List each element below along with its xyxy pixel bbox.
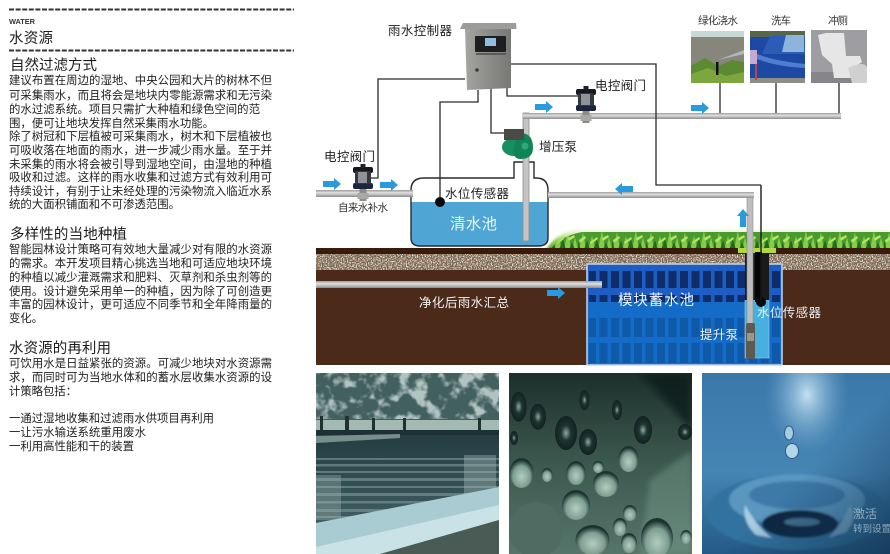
underground soil	[316, 248, 890, 365]
label: valve right: 电控阀门	[595, 78, 646, 93]
text block: water reuse: 计策略包括：	[9, 384, 77, 398]
label: module tank: 模块蓄水池	[618, 292, 694, 309]
top dashed rule	[9, 8, 294, 10]
sensor in module tank	[756, 297, 766, 307]
label: tap water: 自来水补水	[338, 201, 388, 214]
building band	[316, 420, 499, 430]
valve left	[353, 164, 373, 201]
label: WATER: WATER	[9, 17, 36, 26]
text block: diverse local planting: 的需求。本开发项目精心挑选当地和可适应地块环境	[9, 256, 272, 270]
text block: natural filtration: 持续设计，有别于让未经处理的污染物流入临近水系	[9, 184, 272, 198]
list: reuse strategies: 一通过湿地收集和过滤雨水供项目再利用	[9, 411, 214, 425]
photo: pond	[316, 373, 499, 554]
valve right	[576, 86, 596, 123]
text block: natural filtration: 统的大面积铺面和不可渗透范围。	[9, 197, 180, 211]
text block: diverse local planting: 丰富的园林设计，更可适应不同季节和全年降雨量的	[9, 297, 272, 311]
text block: natural filtration: 可吸收落在地面的雨水，进一步减少雨水量。至于并	[9, 143, 272, 157]
label: irrigation: 绿化浇水	[698, 14, 738, 27]
text block: natural filtration: 的水过滤系统。项目只需扩大种植和绿色空间的范	[9, 102, 260, 116]
faint watermark: 转到设置	[853, 523, 890, 535]
title: water resources: 水资源	[9, 30, 54, 47]
lift pump	[746, 323, 755, 359]
text block: diverse local planting: 变化。	[9, 311, 43, 325]
text block: diverse local planting	[9, 242, 273, 325]
text block: natural filtration: 围，便可让地块发挥自然采集雨水功能。	[9, 116, 214, 130]
photo: toilet	[811, 30, 867, 83]
label: lift pump: 提升泵	[700, 327, 738, 342]
text block: water reuse: 求，而同时可为当地水体和的蓄水层收集水资源的设	[9, 370, 272, 384]
text block: natural filtration: 建议布置在周边的湿地、中央公园和大片的树林不但	[9, 73, 273, 87]
arrow: into tank	[547, 287, 565, 299]
module storage tank	[587, 264, 782, 365]
list: reuse strategies: 一利用高性能和干的装置	[9, 439, 134, 453]
faint watermark: 激活	[853, 507, 877, 521]
sensor in clear tank	[435, 197, 445, 207]
lift pump riser pipe	[747, 195, 753, 325]
label: clear water tank: 清水池	[450, 215, 497, 233]
rainwater controller cabinet	[460, 23, 516, 90]
label: car wash: 洗车	[771, 14, 791, 27]
panel: water text column	[9, 10, 294, 453]
text block: diverse local planting: 使用。设计避免采用单一的种植，因为除了可创造更	[9, 284, 273, 298]
faint watermark	[853, 507, 890, 535]
chart: rainwater system diagram	[316, 14, 890, 365]
text block: natural filtration	[9, 73, 273, 211]
text block: natural filtration: 吸收和过滤。这样的雨水收集和过滤方式有效利用可	[9, 170, 272, 184]
label: rainwater controller: 雨水控制器	[388, 24, 452, 38]
label: toilet: 冲厕	[828, 14, 848, 27]
text block: natural filtration: 未采集的雨水将会被引导到湿地空间，由湿地的种植	[9, 157, 272, 171]
photo: water splash	[702, 373, 890, 554]
label: collection: 净化后雨水汇总	[419, 296, 509, 310]
water drops	[784, 426, 798, 458]
grass strip	[546, 228, 890, 250]
label: valve left: 电控阀门	[324, 149, 375, 164]
clean water tank	[411, 162, 548, 246]
booster pump	[502, 129, 533, 159]
pump shaft	[738, 248, 776, 358]
text block: water reuse	[9, 356, 272, 398]
label: water level sensor lower: 水位传感器	[757, 305, 821, 320]
control wires	[370, 64, 839, 200]
heading: diverse local planting: 多样性的当地种植	[10, 226, 127, 243]
sewer inlet pipe	[316, 281, 602, 288]
text block: water reuse: 可饮用水是日益紧张的资源。可减少地块对水资源需	[9, 356, 272, 370]
pipes	[316, 113, 841, 241]
label: level sensor upper: 水位传感器	[445, 186, 509, 201]
heading: water reuse: 水资源的再利用	[9, 340, 111, 357]
list: reuse strategies: 一让污水输送系统重用废水	[9, 425, 147, 439]
text block: natural filtration: 除了树冠和下层植被可采集雨水，树木和下层植被也	[9, 129, 272, 143]
text block: natural filtration: 可采集雨水，而且将会是地块内零能源需求和无污染	[9, 88, 272, 102]
arrows: flow	[323, 101, 749, 227]
text block: diverse local planting: 智能园林设计策略可有效地大量减少对有限的水资源	[9, 242, 273, 256]
label: booster pump: 增压泵	[539, 139, 577, 154]
photo: car wash	[750, 31, 805, 83]
text block: diverse local planting: 的种植以减少灌溉需求和肥料、灭草剂和杀虫剂等的	[9, 270, 272, 284]
list: reuse strategies	[9, 411, 214, 453]
heading: natural filtration: 自然过滤方式	[10, 57, 98, 74]
photo: water droplets on leaf	[509, 373, 692, 554]
photo: sprinkler	[691, 31, 744, 83]
